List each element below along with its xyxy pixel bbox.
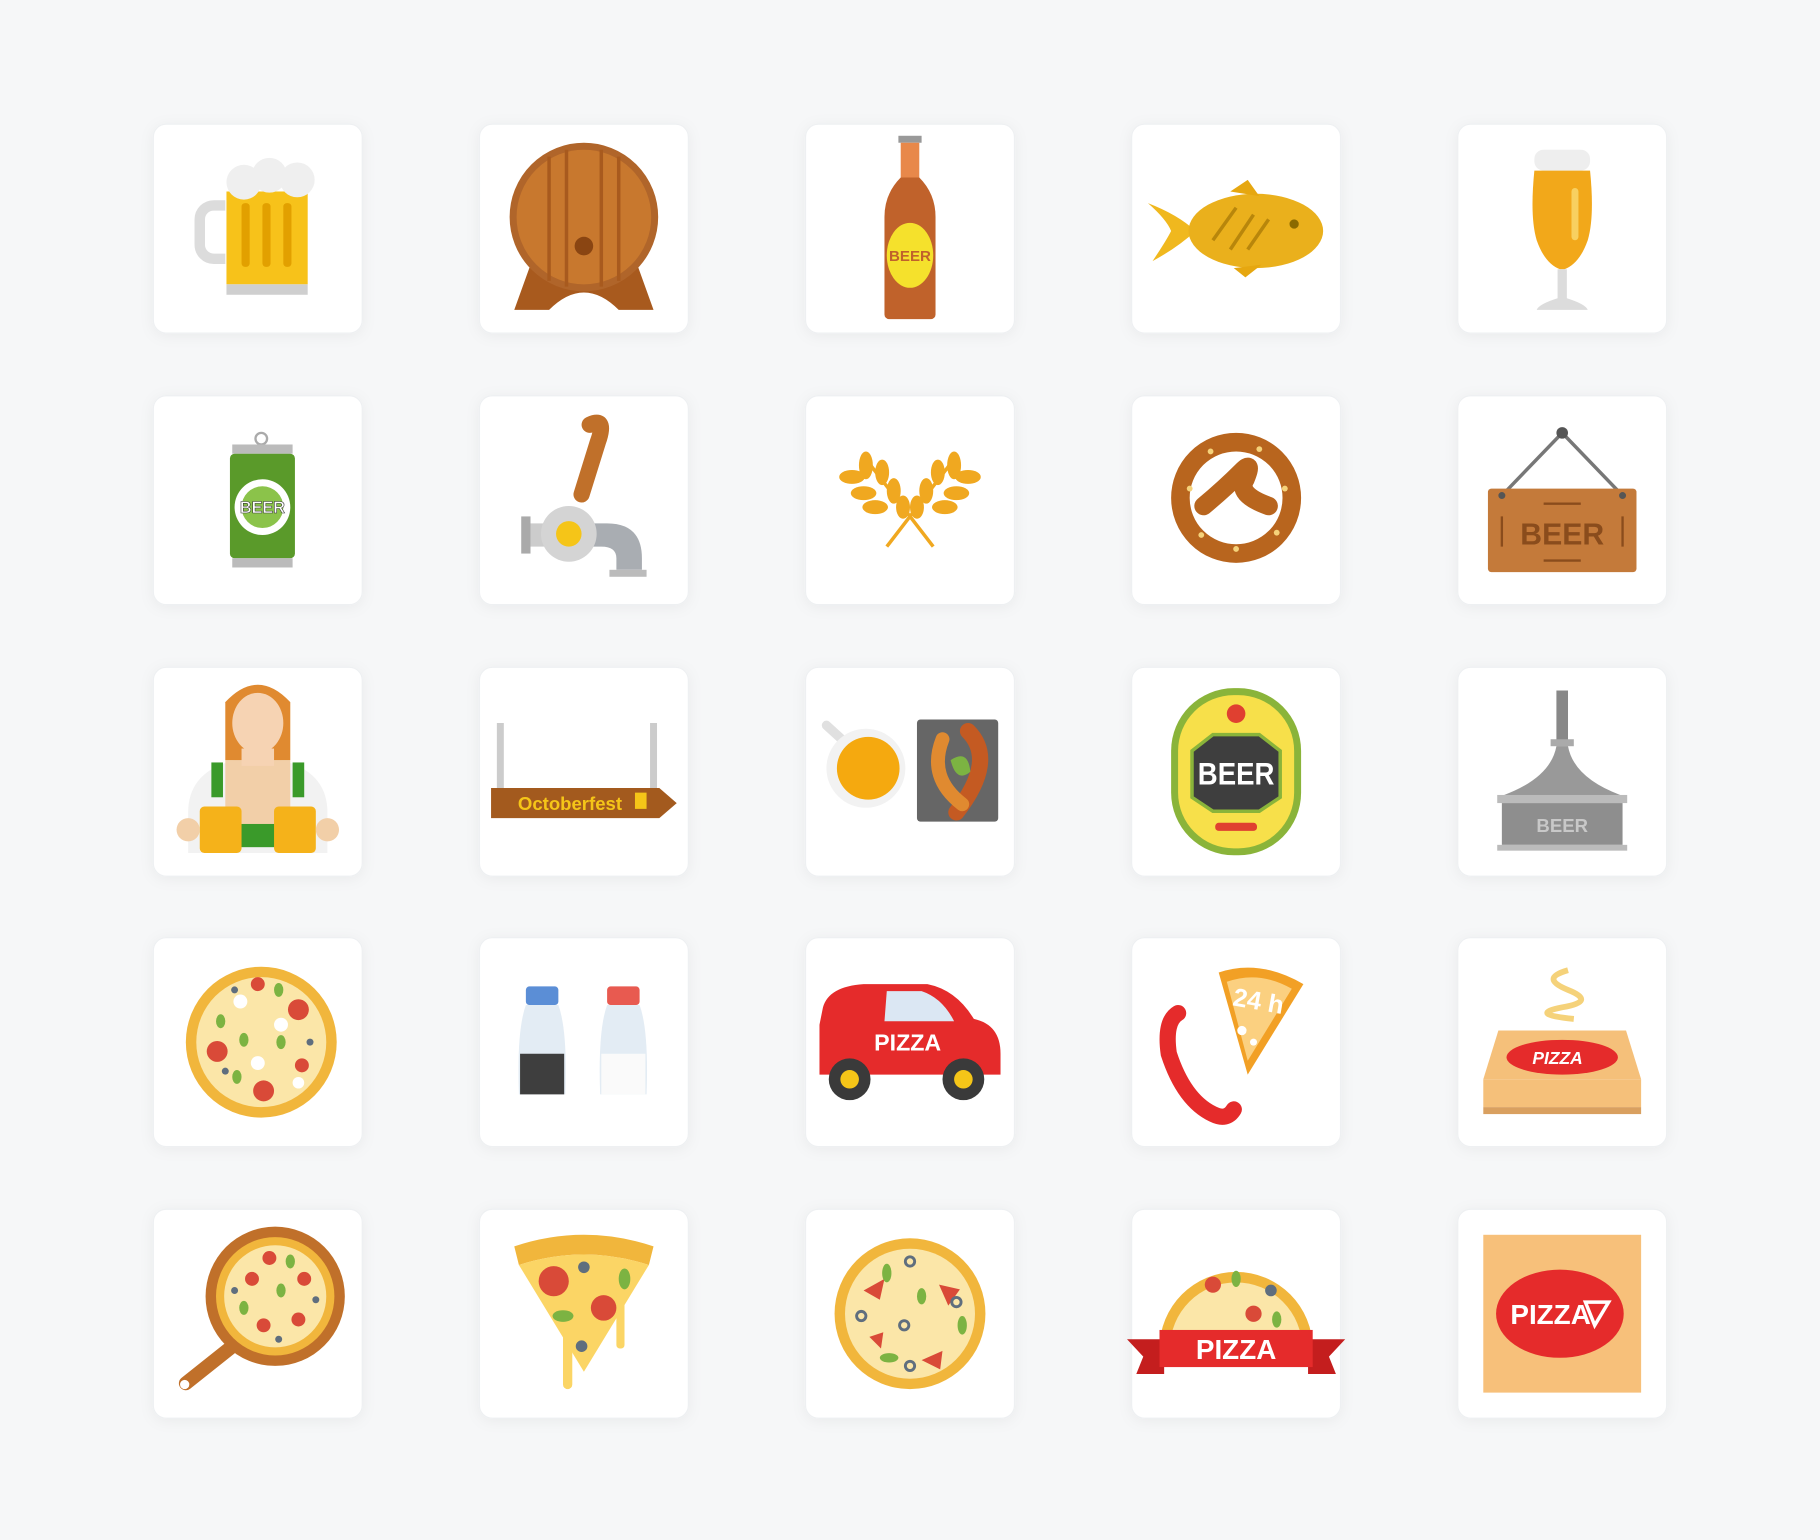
icon: oktoberfest waitress (177, 685, 339, 853)
card: pizza (153, 938, 362, 1147)
card: brew kettle (1458, 667, 1667, 876)
card: wheat (806, 396, 1014, 605)
icon: salt and pepper shakers (518, 986, 647, 1094)
card: fish (1132, 124, 1341, 333)
icon: pizza slice (514, 1235, 654, 1389)
icon: pizza box logo (1483, 1235, 1641, 1393)
icon: phone and pizza slice: 24 h (1231, 984, 1286, 1020)
card: pan pizza (153, 1209, 362, 1418)
card: pretzel (1132, 396, 1341, 605)
card: waitress (153, 667, 362, 876)
card: pizza top view (806, 1209, 1014, 1418)
icon: beer can (230, 433, 295, 567)
icon: pizza box logo: PIZZA (1510, 1299, 1591, 1330)
card: salt and pepper (479, 938, 688, 1147)
icon: beer can: BEER (240, 499, 285, 517)
card: hanging sign (1458, 396, 1667, 605)
icon: brew kettle (1497, 691, 1627, 851)
icon: wheat (839, 451, 981, 547)
icon: pizza ribbon badge: PIZZA (1196, 1334, 1276, 1365)
icon: pizza ribbon badge (1127, 1271, 1345, 1374)
icon: barrel (513, 146, 655, 310)
card: beer and sausage (806, 667, 1014, 876)
icon: octoberfest sign (491, 723, 677, 818)
icon: pizza box (1483, 970, 1641, 1114)
icon: hanging beer sign: BEER (1520, 518, 1604, 551)
card: pizza with ribbon (1127, 1209, 1345, 1418)
icon: beer tap (521, 423, 647, 577)
icon: beer mug (200, 158, 315, 295)
card: beer bottle (806, 124, 1014, 333)
card: beer tap (479, 396, 688, 605)
card: pizza slice (479, 1209, 688, 1418)
card: beer can (153, 396, 362, 605)
icon: pizza pan (180, 1227, 345, 1389)
icon: octoberfest sign: Octoberfest (518, 793, 622, 814)
card: barrel (479, 124, 688, 333)
icon: hanging beer sign (1488, 427, 1636, 572)
icon: pizza delivery car: PIZZA (874, 1029, 941, 1055)
card: pizza box steaming (1458, 938, 1667, 1147)
icon: fish (1148, 180, 1323, 277)
icon: pizza (835, 1238, 985, 1389)
card: tulip glass (1458, 124, 1667, 333)
icon: pretzel (1180, 442, 1292, 554)
icon: phone and pizza slice (1168, 968, 1303, 1117)
card: pizza box logo (1458, 1209, 1667, 1418)
icon: beer bottle (884, 136, 936, 319)
icon: beer bottle: BEER (889, 248, 931, 265)
icon: pizza delivery car (819, 984, 1001, 1100)
card: pizza delivery car (806, 938, 1014, 1147)
card: octoberfest sign (479, 667, 688, 876)
icon: beer badge (1171, 688, 1301, 855)
icon: beer and sausage plate (826, 720, 998, 822)
icon: brew kettle: BEER (1536, 815, 1589, 836)
icon: beer badge: BEER (1198, 757, 1274, 792)
card: beer badge (1132, 667, 1341, 876)
icon: pizza (186, 967, 337, 1118)
card: beer mug (153, 124, 362, 333)
card: 24h pizza phone (1132, 938, 1341, 1147)
icon: tulip beer glass (1532, 150, 1592, 310)
icon: pizza box: PIZZA (1532, 1048, 1583, 1068)
